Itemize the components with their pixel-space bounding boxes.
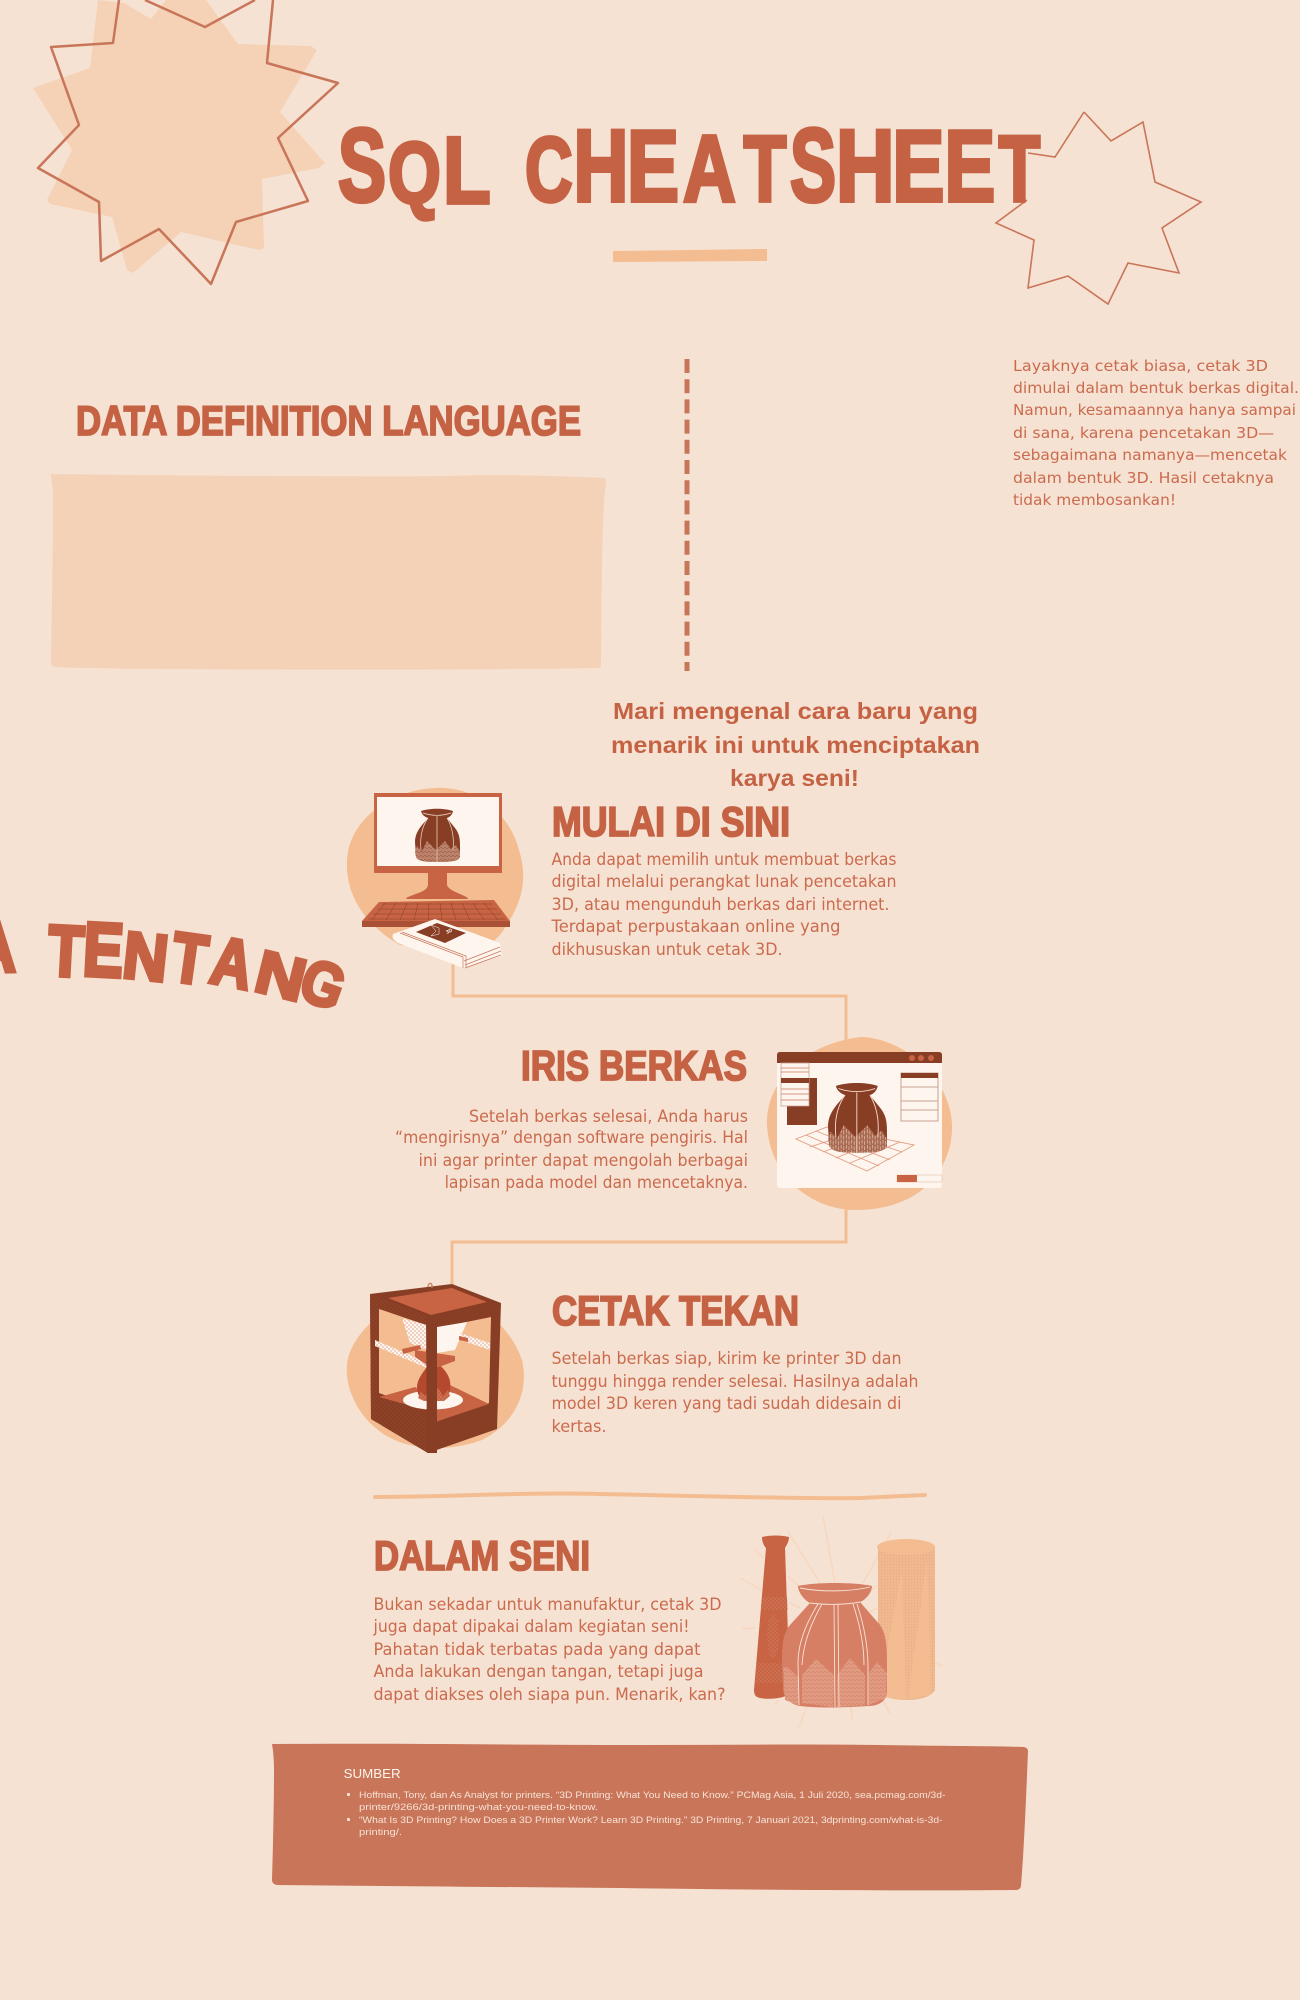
large pot <box>782 1583 887 1708</box>
heading: data definition language: DATA DEFINITION LANGUAGE <box>76 397 581 444</box>
text block: introduction paragraph: dalam bentuk 3D. Hasil cetaknya <box>1013 469 1274 487</box>
text block: iris berkas <box>395 1107 748 1192</box>
text block: introduction paragraph <box>1013 357 1299 509</box>
text block: mulai di sini: digital melalui perangkat lunak pencetakan <box>552 872 896 891</box>
title: L <box>443 118 491 224</box>
text block: dalam seni: Pahatan tidak terbatas pada yang dapat <box>374 1640 701 1659</box>
text block: mulai di sini <box>551 850 896 959</box>
printer top <box>388 1288 487 1315</box>
text block: call to action: Mari mengenal cara baru yang <box>613 698 978 724</box>
text block: cetak tekan: tunggu hingga render selesai. Hasilnya adalah <box>552 1372 918 1391</box>
printer windows <box>379 1309 491 1422</box>
title: T <box>999 118 1040 222</box>
curved heading: a tentang: T <box>167 917 212 1000</box>
footer heading: SUMBER <box>344 1766 401 1781</box>
text block: dalam seni: juga dapat dipakai dalam kegiatan seni! <box>373 1617 690 1636</box>
text block: cetak tekan: Setelah berkas siap, kirim ke printer 3D dan <box>552 1349 902 1368</box>
printed vase <box>417 1362 450 1401</box>
tall vase <box>754 1536 790 1699</box>
vase model <box>828 1083 887 1153</box>
title: H <box>574 110 628 224</box>
text block: mulai di sini: 3D, atau mengunduh berkas dari internet. <box>552 895 890 914</box>
curved heading: a tentang: N <box>249 937 313 1015</box>
footer background <box>272 1744 1028 1890</box>
heading: iris berkas: IRIS BERKAS <box>521 1042 747 1089</box>
text block: cetak tekan <box>552 1349 918 1436</box>
title underline bar <box>613 249 767 262</box>
text block: call to action: karya seni! <box>730 765 859 791</box>
curved heading: a tentang: E <box>81 906 126 994</box>
print head <box>402 1336 468 1367</box>
text block: mulai di sini: dikhususkan untuk cetak 3D. <box>552 940 782 959</box>
decorative star outline, top left <box>38 0 338 284</box>
cylinder <box>877 1539 935 1700</box>
text block: introduction paragraph: sebagaimana namanya—mencetak <box>1013 446 1287 464</box>
text block: iris berkas: “mengirisnya” dengan software pengiris. Hal <box>395 1128 748 1147</box>
icon: computer with vase model and book <box>347 788 523 968</box>
text block: introduction paragraph: Namun, kesamaannya hanya sampai <box>1013 401 1296 419</box>
source list <box>347 1790 945 1838</box>
right panel <box>901 1073 938 1121</box>
title: C <box>525 118 573 221</box>
peach blob <box>347 788 523 955</box>
flow connector: step 2 to step 3 <box>452 1200 846 1290</box>
source list: Hoffman, Tony, dan As Analyst for printers. “3D Printing: What You Need to Know.” PCMag Asia, 1 Juli 2020, sea.pcmag.com/3d- <box>359 1790 946 1801</box>
curved heading: a tentang: A <box>205 923 259 1005</box>
peach blob <box>767 1037 952 1210</box>
printer floor <box>379 1385 489 1422</box>
text block: dalam seni <box>373 1595 726 1704</box>
text block: dalam seni: Anda lakukan dengan tangan, tetapi juga <box>374 1662 704 1681</box>
title: Q <box>388 124 441 222</box>
text block: iris berkas: lapisan pada model dan mencetaknya. <box>445 1173 748 1192</box>
title: A <box>683 115 736 221</box>
title: E <box>627 110 679 223</box>
book <box>393 919 502 968</box>
title: E <box>892 110 944 223</box>
text block: introduction paragraph: dimulai dalam bentuk berkas digital. <box>1013 379 1299 397</box>
progress bar <box>897 1175 942 1182</box>
text block: iris berkas: Setelah berkas selesai, Anda harus <box>469 1107 748 1126</box>
peach blob <box>347 1296 524 1448</box>
heading: mulai di sini: MULAI DI SINI <box>552 798 790 845</box>
rods <box>375 1340 427 1368</box>
text block: call to action: menarik ini untuk menciptakan <box>611 732 980 758</box>
text block: cetak tekan: kertas. <box>552 1417 606 1436</box>
title: T <box>744 116 786 221</box>
build plate <box>403 1390 463 1410</box>
icon: 3D printer <box>347 1283 524 1453</box>
monitor <box>374 793 502 899</box>
text block: call to action <box>611 698 980 791</box>
text block: mulai di sini: Anda dapat memilih untuk membuat berkas <box>552 850 896 869</box>
vertical dashed divider <box>684 359 690 671</box>
curved heading: a tentang: N <box>119 918 172 996</box>
icon: slicer software window <box>767 1037 952 1210</box>
text block: mulai di sini: Terdapat perpustakaan online yang <box>551 917 840 936</box>
text block: cetak tekan: model 3D keren yang tadi sudah didesain di <box>552 1394 902 1413</box>
wavy section divider <box>375 1494 925 1498</box>
title: E <box>944 109 995 222</box>
text block: dalam seni: dapat diakses oleh siapa pun. Menarik, kan? <box>374 1685 726 1704</box>
title: H <box>836 109 894 223</box>
book: 3D <box>445 927 454 936</box>
hopper <box>402 1318 427 1350</box>
decorative star outline, top right <box>996 112 1201 304</box>
perspective grid <box>796 1127 914 1171</box>
source list: printer/9266/3d-printing-what-you-need-to-know. <box>359 1802 598 1813</box>
panel: sources footer <box>272 1744 1028 1890</box>
text block: introduction paragraph: tidak membosankan! <box>1013 491 1176 509</box>
text block: dalam seni: Bukan sekadar untuk manufaktur, cetak 3D <box>374 1595 722 1614</box>
flow connector: step 1 to step 2 <box>453 960 846 1050</box>
title: S <box>790 107 836 223</box>
decorative filled star, top left <box>33 0 325 273</box>
heading: dalam seni: DALAM SENI <box>374 1532 590 1579</box>
keyboard <box>362 900 510 927</box>
title: S <box>338 107 386 223</box>
source list: printing/. <box>359 1827 402 1838</box>
panel: empty definition box <box>50 474 606 670</box>
printer frame <box>370 1284 501 1453</box>
light rays <box>741 1516 943 1727</box>
heading: cetak tekan: CETAK TEKAN <box>552 1287 799 1334</box>
front post <box>426 1317 437 1453</box>
title <box>338 107 1040 224</box>
window <box>777 1052 942 1188</box>
text block: introduction paragraph: Layaknya cetak biasa, cetak 3D <box>1013 357 1268 375</box>
text block: iris berkas: ini agar printer dapat mengolah berbagai <box>418 1151 748 1170</box>
left panels <box>781 1063 817 1125</box>
text block: introduction paragraph: di sana, karena pencetakan 3D— <box>1013 424 1274 442</box>
curved heading: a tentang: G <box>291 945 354 1024</box>
curved heading: a tentang: T <box>46 910 86 992</box>
source list: “What Is 3D Printing? How Does a 3D Printer Work? Learn 3D Printing.” 3D Printing, 7 Januari 2021, 3dprinting.com/what-is-3d- <box>359 1815 942 1826</box>
icon: three art vases <box>741 1516 943 1727</box>
curved heading: a tentang <box>0 906 354 1024</box>
